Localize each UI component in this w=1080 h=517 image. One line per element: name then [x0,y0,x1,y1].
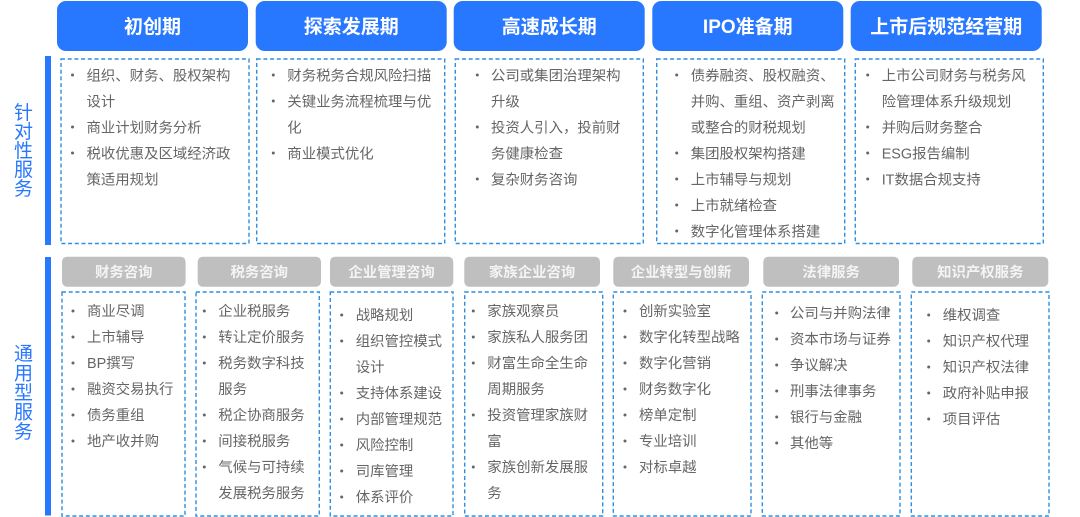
panel: IPO准备期 services: 并购、重组、资产剥离 [691,94,835,110]
panel: 知识产权服务 list: 政府补贴申报 [943,385,1029,402]
side label: 针对性服务: 对 [14,121,33,143]
panel: 家族企业咨询 list: 周期服务 [487,381,545,398]
panel: 知识产权服务 list: 知识产权法律 [943,359,1029,376]
stage headers [57,1,1042,51]
panel: 初创期 services: 商业计划财务分析 [86,120,202,136]
panel: IPO准备期 services [657,59,845,244]
panel: 初创期 services: 组织、财务、股权架构 [86,68,230,84]
panel: 企业管理咨询 list: 战略规划 [356,307,413,324]
panel: 财务咨询 list: 商业尽调 [87,303,145,320]
category: 财务咨询: 财务咨询 [95,263,153,281]
side label: 通用型服务: 务 [14,421,33,443]
category: 企业管理咨询 [330,257,453,287]
header: IPO准备期: IPO准备期 [703,16,793,38]
panel: 知识产权服务 list: 维权调查 [943,307,1000,324]
panel: 高速成长期 services: 升级 [491,94,520,110]
panel: 法律服务 list: 银行与金融 [790,409,862,426]
panel: 上市后规范经营期 services: ESG报告编制 [882,146,970,162]
panel: 家族企业咨询 list: 财富生命全生命 [487,354,588,372]
panel: 企业转型与创新 list: 数字化转型战略 [639,329,740,346]
panel: 探索发展期 services: 关键业务流程梳理与优 [287,94,431,110]
category: 知识产权服务: 知识产权服务 [937,263,1023,281]
panel: 税务咨询 list: 企业税服务 [218,302,290,320]
category: 企业转型与创新: 企业转型与创新 [631,263,731,281]
panel: IPO准备期 services: 上市就绪检查 [691,198,777,214]
header: 探索发展期 [256,1,447,51]
panel: 高速成长期 services: 务健康检查 [491,146,563,162]
category: 企业管理咨询: 企业管理咨询 [348,263,435,281]
panel: 上市后规范经营期 services: 险管理体系升级规划 [882,94,1011,110]
category: 税务咨询: 税务咨询 [231,263,288,281]
panel: 税务咨询 list: 气候与可持续 [218,459,305,476]
panel: 高速成长期 services [455,59,643,244]
panel: 企业转型与创新 list: 数字化营销 [639,355,711,372]
category: 知识产权服务 [912,257,1048,287]
header: 高速成长期: 高速成长期 [502,15,597,38]
panel: 企业转型与创新 list: 专业培训 [639,433,697,450]
category: 税务咨询 [198,257,321,287]
panel: 企业管理咨询 list [330,292,453,516]
side label: 针对性服务: 针 [14,102,33,124]
panel: 上市后规范经营期 services: 并购后财务整合 [882,120,982,136]
panel: 高速成长期 services: 公司或集团治理架构 [491,68,621,84]
panel: 初创期 services: 设计 [86,94,115,110]
panel: 企业管理咨询 list: 司库管理 [356,463,413,480]
panel: 探索发展期 services: 财务税务合规风险扫描 [287,68,431,84]
panel: 企业转型与创新 list: 财务数字化 [639,381,711,398]
panel: 高速成长期 services: 复杂财务咨询 [491,170,577,188]
category: 法律服务 [763,257,899,287]
header: 上市后规范经营期 [851,1,1042,51]
side label: 通用型服务 [14,343,33,443]
panel: 家族企业咨询 list: 家族私人服务团 [487,329,588,346]
panel: 企业管理咨询 list: 设计 [356,359,384,376]
panel: 上市后规范经营期 services: 上市公司财务与税务风 [882,68,1026,84]
panel: 家族企业咨询 list: 务 [487,485,502,502]
side label: 通用型服务: 服 [14,402,33,424]
panel: 企业转型与创新 list: 对标卓越 [639,459,697,476]
panel: 税务咨询 list: 服务 [218,381,247,398]
header: 探索发展期: 探索发展期 [304,15,399,38]
panel: 知识产权服务 list: 项目评估 [943,411,1000,428]
panel: 家族企业咨询 list: 投资管理家族财 [487,407,588,424]
header: 上市后规范经营期: 上市后规范经营期 [870,15,1022,38]
header: 初创期 [57,1,248,51]
side label: 通用型服务: 型 [14,382,33,404]
panel: 法律服务 list [762,292,900,516]
panel: 税务咨询 list: 税务数字科技 [218,355,305,372]
side label: 针对性服务: 服 [14,160,33,181]
panel: 税务咨询 list: 转让定价服务 [218,329,305,346]
panel: 探索发展期 services [257,59,445,244]
panel: 企业管理咨询 list: 支持体系建设 [356,385,442,402]
panel: 企业管理咨询 list: 内部管理规范 [356,411,442,428]
panel: 法律服务 list: 其他等 [790,434,833,452]
side label: 针对性服务: 务 [14,178,33,200]
side label: 针对性服务: 性 [14,140,33,162]
panel: 法律服务 list: 争议解决 [790,356,848,374]
panel: 家族企业咨询 list: 家族观察员 [487,302,559,320]
panel: 法律服务 list: 刑事法律事务 [790,383,876,400]
side bar: targeted services [45,56,51,245]
panel: 企业管理咨询 list: 体系评价 [356,489,413,506]
panel: IPO准备期 services: 集团股权架构搭建 [691,146,806,162]
panel: 财务咨询 list: 上市辅导 [87,329,145,346]
header: 高速成长期 [454,1,645,51]
panel: 法律服务 list: 资本市场与证券 [790,331,891,348]
panel: IPO准备期 services: 上市辅导与规划 [691,172,791,188]
category: 法律服务: 法律服务 [802,263,860,281]
category headers [62,257,1048,287]
panel: 初创期 services: 税收优惠及区域经济政 [86,146,230,162]
panel: 知识产权服务 list: 知识产权代理 [943,333,1029,350]
panel: IPO准备期 services: 数字化管理体系搭建 [691,224,820,240]
panel: 家族企业咨询 list: 富 [487,432,502,450]
panel: 税务咨询 list: 间接税服务 [218,433,290,450]
panel: 上市后规范经营期 services [855,59,1043,244]
header: 初创期: 初创期 [124,16,181,38]
panel: 初创期 services: 策适用规划 [86,172,158,188]
panel: 财务咨询 list: BP撰写 [87,355,135,372]
panel: 上市后规范经营期 services: IT数据合规支持 [882,172,981,188]
panel: 财务咨询 list: 融资交易执行 [87,380,173,398]
panel: 财务咨询 list [62,292,185,516]
side label: 通用型服务: 用 [14,364,33,384]
panel: 财务咨询 list: 地产收并购 [87,433,159,450]
panel: 税务咨询 list: 发展税务服务 [218,485,305,502]
category: 家族企业咨询: 家族企业咨询 [489,263,575,281]
category: 企业转型与创新 [613,257,749,287]
panel: 高速成长期 services: 投资人引入，投前财 [491,120,621,136]
panel: 知识产权服务 list [911,292,1049,516]
panel: 探索发展期 services: 商业模式优化 [287,146,374,162]
panel: 税务咨询 list: 税企协商服务 [218,406,305,424]
panel: 财务咨询 list: 债务重组 [87,407,145,424]
panel: 探索发展期 services: 化 [287,120,302,136]
panel: IPO准备期 services: 债券融资、股权融资、 [691,68,835,84]
side bar: general services [45,257,51,516]
panel: 家族企业咨询 list [465,292,603,516]
panel: 企业转型与创新 list: 榜单定制 [639,407,697,424]
panel: 税务咨询 list [196,292,319,516]
panel: 企业转型与创新 list: 创新实验室 [639,303,711,320]
panel: 家族企业咨询 list: 家族创新发展服 [487,459,588,476]
category: 财务咨询 [62,257,186,287]
panel: 企业管理咨询 list: 风险控制 [356,437,413,454]
category: 家族企业咨询 [464,257,600,287]
panel: 企业转型与创新 list [613,292,751,516]
header: IPO准备期 [652,1,843,51]
panel: 法律服务 list: 公司与并购法律 [790,305,891,322]
side label: 针对性服务 [14,102,33,200]
panel: 初创期 services [61,59,249,244]
panel: IPO准备期 services: 或整合的财税规划 [691,120,806,136]
side label: 通用型服务: 通 [14,343,33,365]
panel: 企业管理咨询 list: 组织管控模式 [356,333,442,350]
